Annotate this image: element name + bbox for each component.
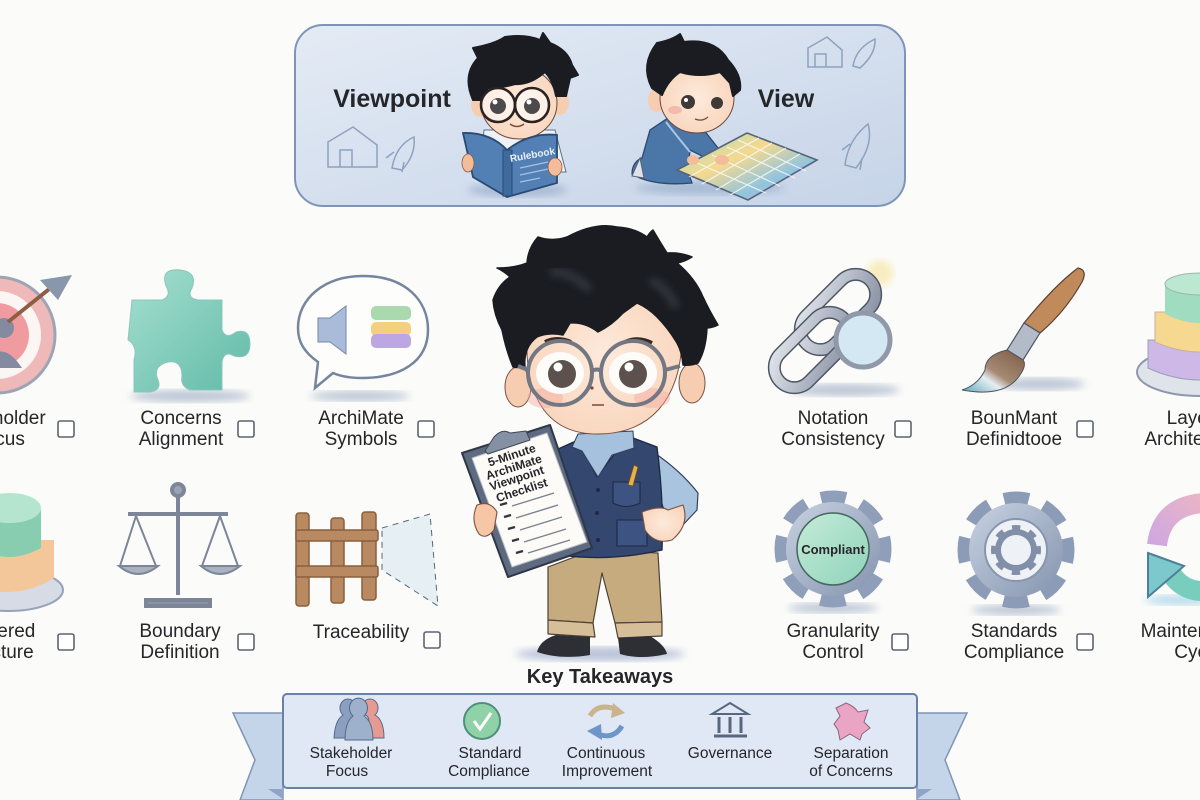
- ears: [505, 367, 531, 407]
- eyebrows: [545, 339, 652, 343]
- icon: people: [334, 698, 384, 740]
- label: notation consistency: [781, 408, 911, 450]
- icon: puzzle splash: [834, 703, 870, 740]
- right hand: [642, 505, 685, 541]
- clipboard: 5-Minute: [486, 441, 538, 469]
- takeaway labels: of Concerns: [809, 763, 893, 780]
- label: layered architecture right: [1144, 408, 1200, 450]
- clipboard: ArchiMate: [484, 451, 544, 483]
- label: standards compliance: Standards: [971, 621, 1057, 642]
- takeaway labels: Continuous: [567, 745, 645, 762]
- label: archimate symbols: ArchiMate: [318, 408, 404, 429]
- label: stakeholder focus: [0, 408, 74, 450]
- glasses and eyes: [536, 352, 584, 394]
- takeaway labels: Focus: [326, 763, 368, 780]
- icon: compliant gear: [783, 499, 883, 613]
- label: traceability: [313, 622, 440, 648]
- label: notation consistency: Notation: [798, 408, 868, 429]
- icon: compliant gear: Compliant: [801, 542, 865, 557]
- label: maintenance cycle: [1141, 621, 1200, 663]
- vest: [556, 436, 662, 558]
- label: concerns alignment: [139, 408, 254, 450]
- icon: layered cake left: [0, 493, 63, 611]
- label: concerns alignment: Alignment: [139, 429, 224, 450]
- takeaway labels: Compliance: [448, 763, 530, 780]
- shirt sleeve: [653, 452, 698, 528]
- label: archimate symbols: Symbols: [325, 429, 397, 450]
- trousers: [548, 550, 662, 623]
- label: granularity control: Granularity: [787, 621, 880, 642]
- clipboard: Checklist: [494, 475, 549, 505]
- character: central child with checklist: [462, 226, 718, 661]
- panel: viewpoint versus view: [295, 25, 905, 206]
- shoes: [537, 635, 667, 657]
- hair: [493, 226, 718, 368]
- icon: speech bubble symbols: [298, 276, 428, 401]
- label: standards compliance: [964, 621, 1093, 663]
- takeaway labels: Improvement: [562, 763, 653, 780]
- heading: key takeaways: Key Takeaways: [527, 666, 673, 688]
- shirt collar: [572, 431, 634, 477]
- takeaway labels: Standard: [459, 745, 521, 762]
- label: boundary definition: Boundary: [139, 621, 221, 642]
- icon: maintenance cycle arrows: [1145, 503, 1200, 605]
- face: [527, 280, 682, 434]
- icon: chain link with magnifier: [766, 260, 900, 396]
- label: concerns alignment: Concerns: [140, 408, 222, 429]
- label: traceability: Traceability: [313, 622, 410, 643]
- takeaway labels: Stakeholder: [310, 745, 392, 762]
- label: granularity control: Control: [802, 642, 864, 663]
- icon: reading child: Rulebook: [509, 146, 556, 165]
- banner: key takeaways: [233, 694, 967, 800]
- takeaway labels: [310, 745, 893, 780]
- heading: Viewpoint: Viewpoint: [333, 85, 451, 113]
- takeaway labels: Governance: [688, 745, 772, 762]
- label: notation consistency: Consistency: [781, 429, 885, 450]
- label: boundary definition: Definition: [140, 642, 220, 663]
- label: granularity control: [787, 621, 908, 663]
- label: boundary definition right: BounMant: [971, 408, 1058, 429]
- left hand: [474, 504, 497, 536]
- icon: check ellipse: [464, 703, 500, 739]
- ribbon tails: [233, 713, 967, 800]
- icon: paint brush: [962, 268, 1085, 392]
- takeaway labels: Separation: [814, 745, 888, 762]
- label: standards compliance: Compliance: [964, 642, 1064, 663]
- icon: reading child: [462, 33, 578, 197]
- icon: institution: [712, 703, 748, 736]
- icon: house and rocket sketches: [328, 37, 875, 172]
- vest pockets: [613, 482, 647, 546]
- label: boundary definition right: Definidtooe: [966, 429, 1062, 450]
- icon: refresh arrows: [587, 703, 625, 740]
- icon: child with map: [632, 34, 817, 200]
- icon: stakeholder target: [0, 275, 72, 393]
- clipboard: Viewpoint: [488, 463, 546, 494]
- label: boundary definition: [139, 621, 254, 663]
- heading: View: View: [758, 85, 815, 113]
- label: layered architecture left: [0, 621, 74, 663]
- clipboard: [462, 425, 592, 577]
- icon: layered cake right: [1137, 273, 1200, 396]
- icon: balance scale: [119, 484, 240, 606]
- icon: standards gear: [966, 500, 1066, 615]
- label: boundary definition right: [966, 408, 1093, 450]
- icon: fence with dashed view: [296, 512, 438, 606]
- label: archimate symbols: [318, 408, 434, 450]
- icon: puzzle piece: [128, 270, 250, 402]
